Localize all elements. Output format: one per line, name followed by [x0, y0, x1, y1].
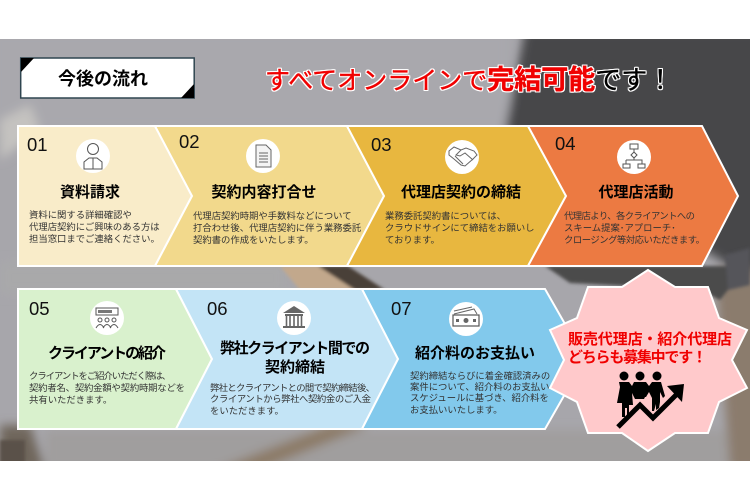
panel: step 04: 代理店活動 [598, 184, 674, 201]
panel: step 01: 01 [27, 134, 48, 155]
panel: step 05: 05 [29, 298, 50, 319]
panel: step 03: ております。 [385, 235, 440, 245]
panel: step 05: クライアントの紹介 [48, 345, 166, 362]
panel: step 05: クライアントをご紹介いただく際は、 [29, 370, 171, 381]
panel: step 06: 弊社クライアント間での [220, 340, 370, 357]
panel: step 02: 契約内容打合せ [211, 183, 317, 201]
panel: step 02: 代理店契約時期や手数料などについて [193, 210, 352, 221]
panel: step 04 [528, 126, 738, 266]
panel: step 06: をいただきます。 [210, 406, 284, 416]
panel: step 06 [176, 289, 398, 429]
panel: step 07: 紹介料のお支払い [415, 344, 535, 362]
panel: step 02: 打合わせ後、代理店契約に伴う業務委託 [193, 222, 362, 233]
title box: 今後の流れ [58, 68, 148, 89]
callout: recruiting starburst [550, 270, 747, 451]
panel: step 04: スキーム提案･アプローチ･ [564, 222, 676, 233]
callout: recruiting starburst: どちらも募集中です！ [568, 348, 707, 366]
icon: bank building [277, 301, 311, 335]
icon: three people with rising arrow [617, 372, 684, 427]
panel: step 01: 資料に関する詳細確認や [29, 209, 132, 220]
panel: step 03: 03 [371, 134, 392, 155]
panel: step 01 [18, 126, 192, 266]
panel: step 02: 契約書の作成をいたします。 [193, 234, 314, 245]
panel: step 05 [18, 289, 212, 429]
panel: step 06: 契約締結 [265, 358, 325, 376]
panel: step 04: クロージング等対応いただきます。 [564, 234, 705, 245]
panel: step 03: 業務委託契約書については、 [385, 210, 506, 221]
panel: step 07: スケジュールに基づき、紹介料を [410, 392, 549, 403]
panel: step 07 [362, 289, 585, 429]
panel: step 04: 04 [555, 133, 576, 154]
panel: step 07: 契約締結ならびに着金確認済みの [410, 370, 550, 381]
icon: handshake [445, 140, 479, 174]
panel: step 01: 担当窓口までご連絡ください。 [29, 233, 160, 244]
panel: step 03 [347, 126, 566, 266]
callout: recruiting starburst: 販売代理店・紹介代理店 [568, 331, 732, 348]
icon: businessman [76, 139, 110, 173]
panel: step 07: お支払いいたします。 [410, 404, 503, 415]
panel: step 02 [155, 126, 384, 266]
panel: step 07: 07 [391, 298, 412, 319]
panel: step 01: 代理店契約にご興味のある方は [29, 221, 160, 232]
panel: step 01: 資料請求 [60, 183, 120, 201]
title box [21, 58, 194, 98]
panel: step 06: 06 [207, 298, 228, 319]
icon: banknotes [449, 302, 483, 336]
panel: step 04: 代理店より、各クライアントへの [564, 210, 695, 221]
panel: step 07: 案件について、紹介料のお支払い [410, 381, 549, 392]
icon: presentation audience [90, 301, 124, 335]
panel: step 02: 02 [179, 131, 200, 152]
panel: step 06: クライアントから弊社へ契約金のご入金 [210, 393, 372, 404]
panel: step 05: 共有いただきます。 [29, 394, 112, 405]
headline: すべてオンラインで完結可能です！ [265, 65, 673, 95]
panel: step 05: 契約者名、契約金額や契約時期などを [29, 382, 185, 393]
panel: step 03: クラウドサインにて締結をお願いし [385, 222, 535, 233]
icon: document [246, 139, 280, 173]
panel: step 03: 代理店契約の締結 [401, 183, 521, 201]
panel: step 06: 弊社とクライアントとの間で契約締結後、 [210, 382, 375, 393]
icon: flowchart [617, 140, 651, 174]
